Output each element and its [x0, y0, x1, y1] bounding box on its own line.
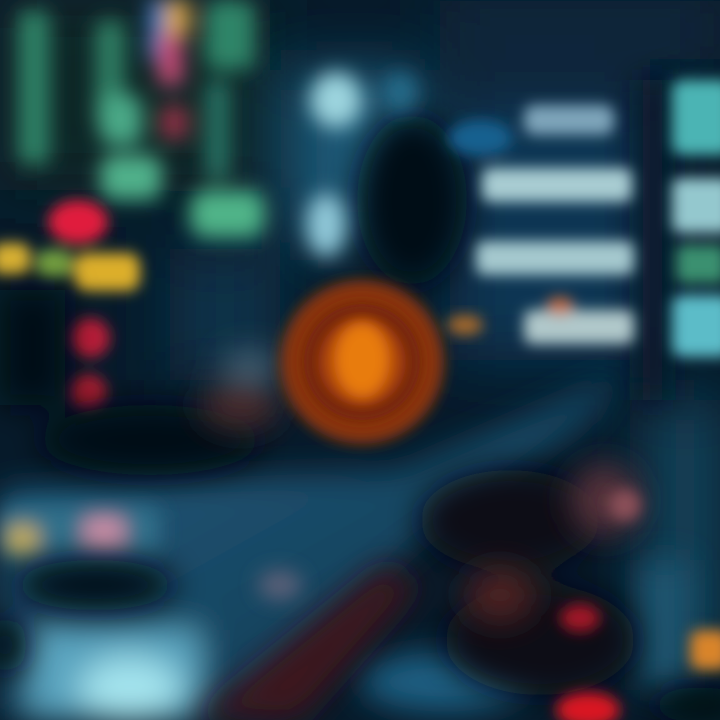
brown arm — [195, 464, 639, 720]
lower-left colour tags — [0, 505, 302, 600]
hand highlight — [200, 351, 280, 429]
desk surface — [0, 375, 690, 720]
right edge screen — [672, 80, 720, 357]
right side glowing spots — [556, 489, 720, 720]
left monitor: green chart — [18, 0, 265, 238]
central text rows on screen — [448, 105, 634, 344]
upper centre glowing panels — [306, 72, 418, 257]
icon: bitcoin coin — [280, 280, 483, 444]
left panel: red and yellow indicators — [0, 200, 140, 410]
